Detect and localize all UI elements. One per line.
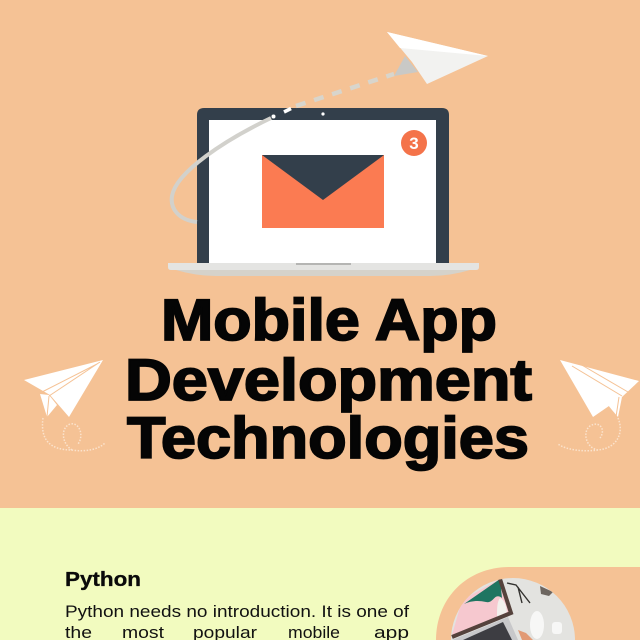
envelope bbox=[262, 155, 384, 228]
camera dot bbox=[321, 112, 325, 116]
mouse bbox=[530, 611, 544, 639]
header background bbox=[0, 0, 640, 508]
laptop base bbox=[168, 263, 479, 276]
icon: left paper plane bbox=[24, 360, 105, 451]
hand bbox=[518, 630, 533, 640]
glasses bbox=[507, 583, 530, 603]
orange image backing bbox=[436, 567, 640, 640]
marble desk bbox=[450, 575, 580, 640]
laptop screen bbox=[209, 120, 436, 263]
title bbox=[125, 288, 532, 471]
flight trail bbox=[172, 74, 394, 222]
tablet screen bbox=[452, 579, 511, 635]
title: Development bbox=[125, 348, 532, 413]
notification badge: 3 bbox=[409, 134, 419, 153]
text block: Python description: Python needs no introduction. It is one of bbox=[65, 603, 409, 621]
lower panel background bbox=[0, 508, 640, 640]
text block: Python description bbox=[65, 603, 409, 640]
small object bbox=[540, 586, 553, 596]
tablet frame bbox=[452, 579, 511, 637]
title: Technologies bbox=[127, 406, 529, 471]
notification badge bbox=[401, 130, 427, 156]
icon: large paper plane bbox=[387, 32, 488, 84]
laptop lid bbox=[197, 108, 449, 263]
keyboard bbox=[452, 617, 518, 640]
icon: right paper plane bbox=[558, 360, 639, 451]
title: Mobile App bbox=[161, 288, 497, 353]
heading: Python: Python bbox=[65, 569, 141, 591]
earbud case bbox=[552, 622, 562, 634]
illustration: laptop with email bbox=[168, 108, 479, 276]
photo: laptop on desk bbox=[450, 575, 580, 640]
